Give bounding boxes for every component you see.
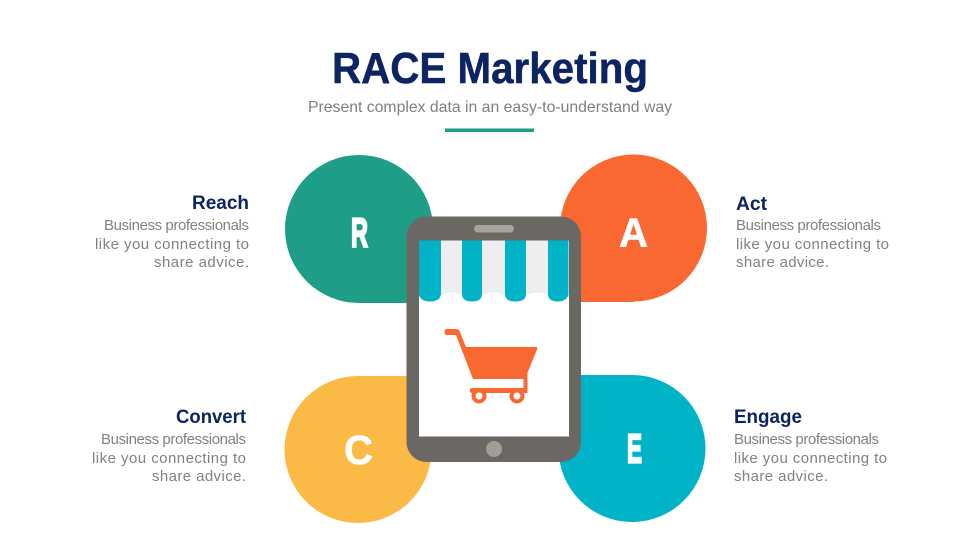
title underline [445, 128, 534, 132]
blob: C: C [344, 427, 373, 473]
panel: Convert text [92, 407, 247, 485]
speaker [474, 225, 514, 232]
panel: Act text: like you connecting to [736, 236, 889, 253]
panel: Act text: Business professionals [736, 217, 881, 234]
blob: C [284, 376, 432, 523]
icon: shopping cart [444, 329, 537, 404]
panel: Reach text: share advice. [154, 254, 249, 271]
panel: Engage text [734, 407, 887, 485]
home button [486, 441, 502, 457]
blob: E [558, 375, 706, 522]
title: RACE Marketing [332, 44, 648, 93]
subtitle: Present complex data in an easy-to-understand way [308, 99, 672, 116]
panel: Convert text: Convert [176, 407, 247, 428]
blob: R: R [351, 210, 368, 256]
blob: A [560, 154, 707, 302]
panel: Reach text: like you connecting to [95, 236, 249, 253]
panel: Act text [736, 194, 889, 271]
panel: Convert text: like you connecting to [92, 450, 246, 467]
awning [419, 240, 568, 302]
panel: Act text: share advice. [736, 254, 829, 271]
panel: Engage text: Business professionals [734, 431, 879, 448]
tablet body [406, 216, 581, 462]
panel: Convert text: Business professionals [101, 431, 246, 448]
panel: Reach text: Business professionals [104, 217, 249, 234]
blob: E: E [627, 426, 642, 472]
blob: A: A [619, 210, 648, 256]
panel: Reach text: Reach [192, 193, 249, 214]
panel: Reach text [95, 193, 249, 271]
blob: R [285, 155, 433, 303]
tablet [406, 216, 581, 462]
panel: Act text: Act [736, 194, 768, 215]
tablet screen [419, 240, 569, 436]
panel: Convert text: share advice. [152, 468, 246, 485]
panel: Engage text: Engage [734, 407, 802, 428]
panel: Engage text: like you connecting to [734, 450, 887, 467]
panel: Engage text: share advice. [734, 468, 828, 485]
